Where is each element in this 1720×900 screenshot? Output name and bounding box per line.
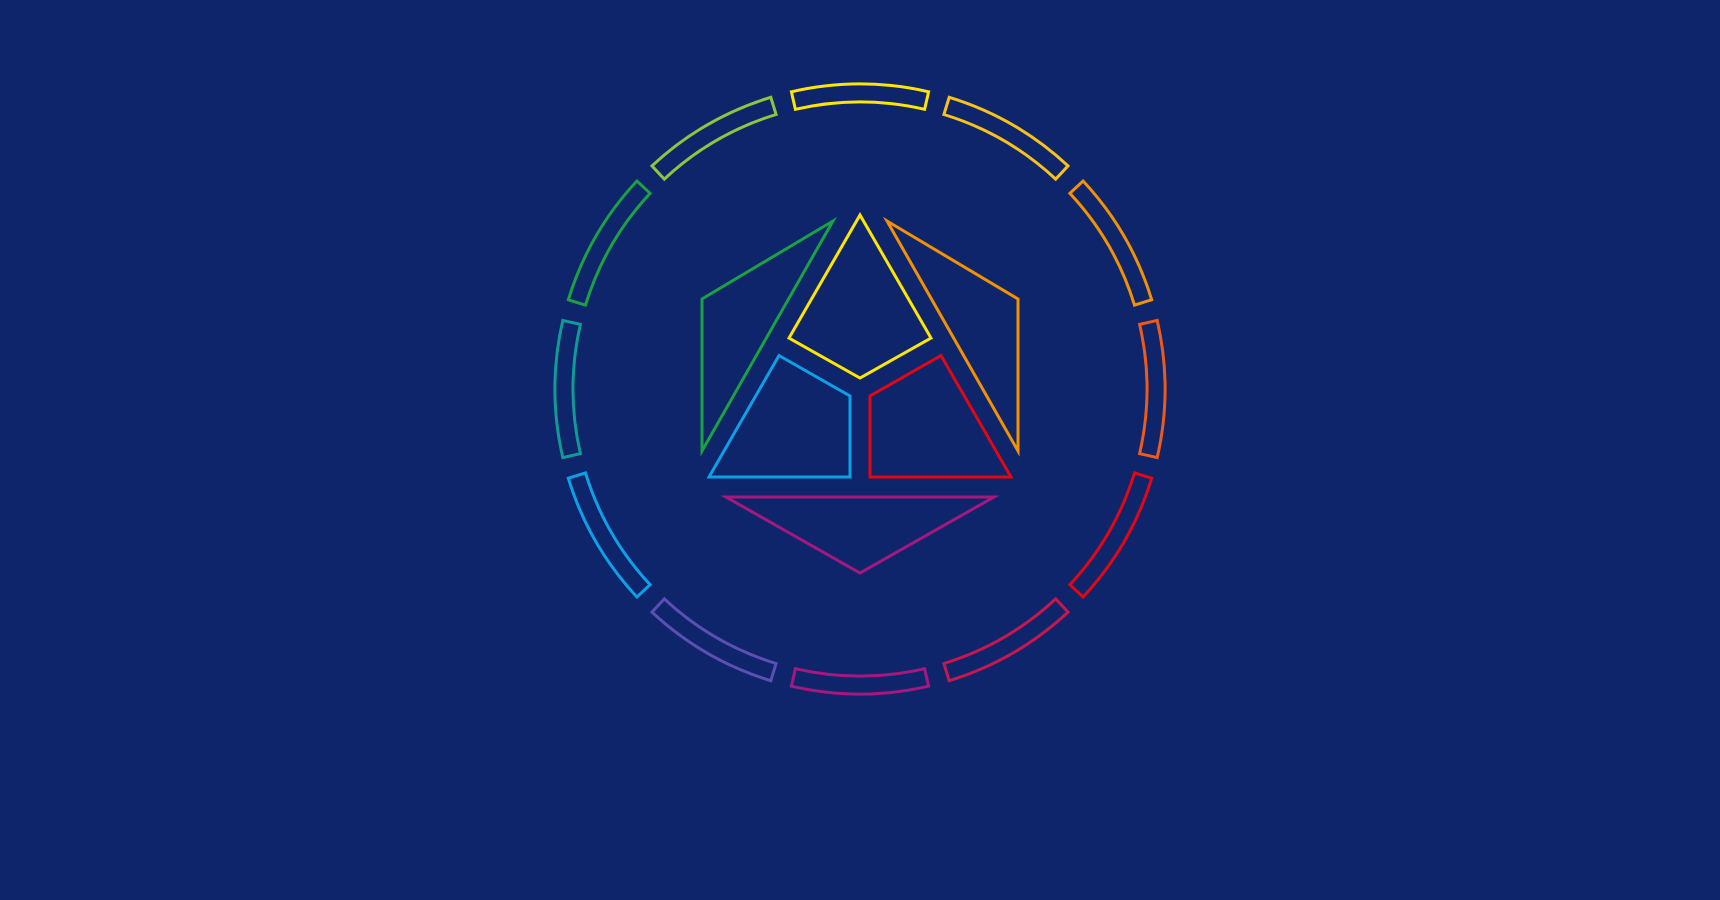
segment: teal: [555, 320, 580, 458]
segment: lime: [652, 97, 776, 179]
segment: crimson: [944, 599, 1068, 681]
segment: amber: [944, 97, 1068, 179]
shape: green left: [702, 221, 833, 451]
shape: red lower right: [870, 356, 1011, 477]
segment: orange-red: [1140, 320, 1165, 458]
segment: top yellow: [791, 84, 929, 109]
shape: blue lower left: [709, 356, 850, 477]
segment: orange: [1070, 181, 1152, 305]
segment: green: [568, 181, 650, 305]
shape: orange right: [887, 221, 1018, 451]
shape: yellow top triangle: [789, 215, 931, 378]
segment: purple: [652, 599, 776, 681]
shape: magenta bottom triangle: [726, 497, 994, 573]
ring of segments: [555, 84, 1165, 694]
segment: magenta bottom: [791, 669, 929, 694]
segment: red: [1070, 473, 1152, 597]
segment: blue: [568, 473, 650, 597]
